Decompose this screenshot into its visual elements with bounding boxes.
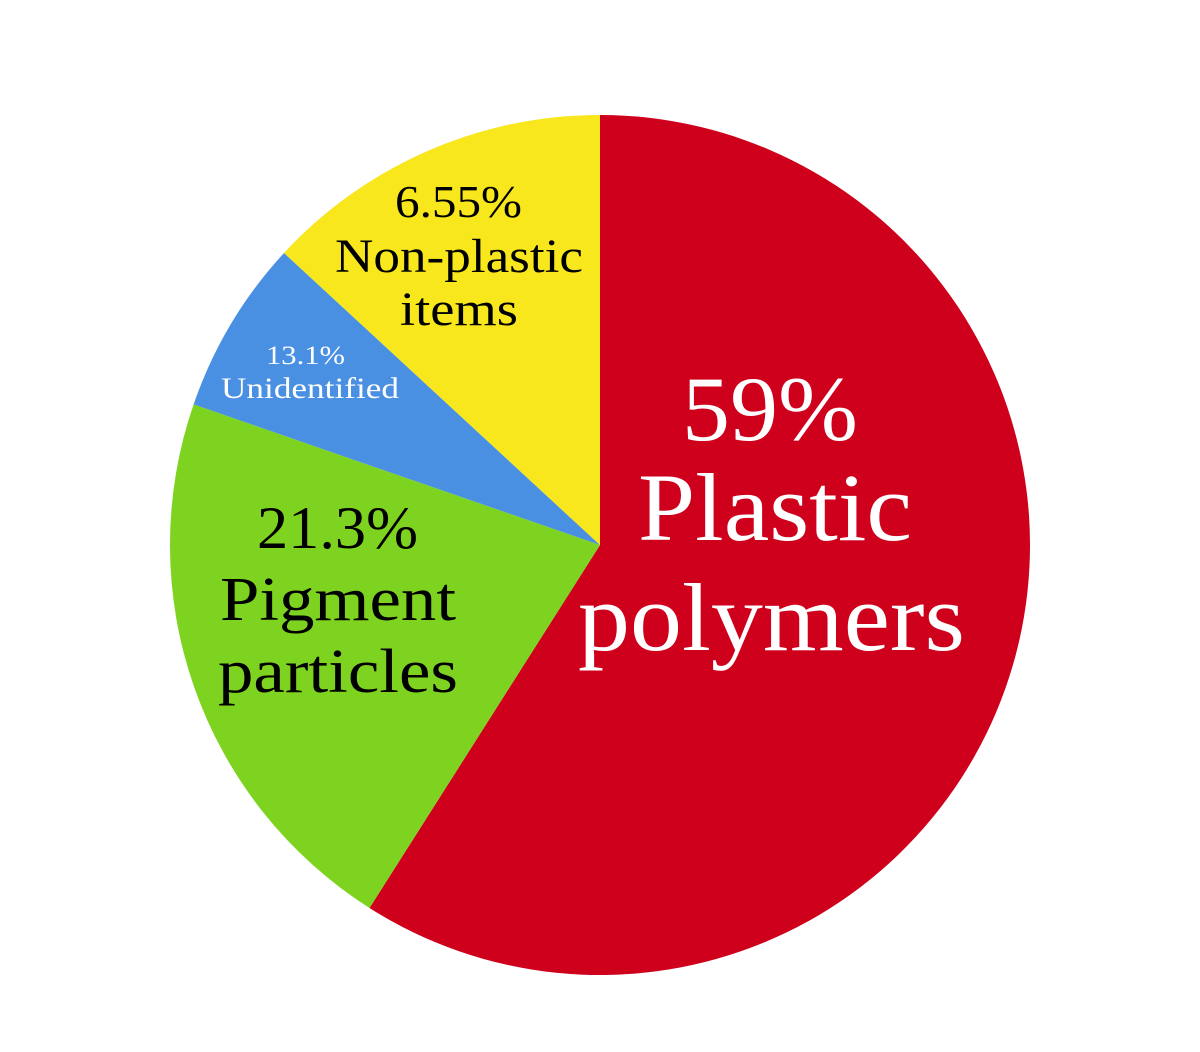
label: pigment particles: Pigment bbox=[220, 566, 456, 634]
label: non-plastic items: items bbox=[400, 283, 518, 336]
slice: pigment particles bbox=[170, 404, 600, 908]
label: non-plastic items: 6.55% bbox=[395, 176, 522, 227]
label: pigment particles: particles bbox=[218, 638, 458, 706]
label: plastic polymers: 59% bbox=[682, 358, 858, 460]
label: unidentified bbox=[221, 341, 399, 405]
slice: plastic polymers bbox=[370, 115, 1030, 975]
label: pigment particles: 21.3% bbox=[257, 495, 418, 561]
label: non-plastic items bbox=[335, 176, 583, 336]
label: unidentified: 13.1% bbox=[266, 341, 345, 370]
label: plastic polymers: polymers bbox=[578, 564, 965, 671]
slice: unidentified bbox=[194, 253, 600, 545]
label: plastic polymers: Plastic bbox=[638, 454, 912, 561]
slice: non-plastic items bbox=[284, 115, 600, 545]
label: pigment particles bbox=[218, 495, 458, 706]
label: plastic polymers bbox=[578, 358, 965, 671]
label: non-plastic items: Non-plastic bbox=[335, 230, 583, 283]
label: unidentified: Unidentified bbox=[221, 372, 399, 405]
